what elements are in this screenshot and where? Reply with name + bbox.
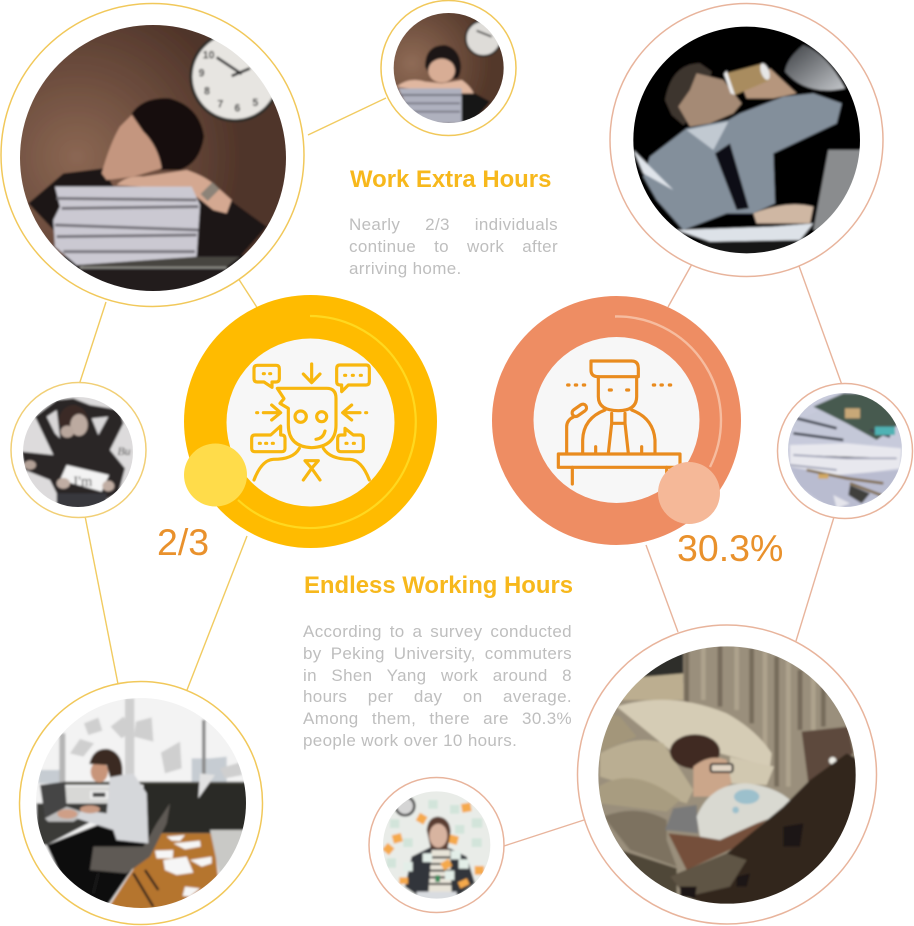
icon: speaker at a podium [558, 361, 680, 484]
photo circle: woman sleeping on paper stack: 6 [234, 103, 240, 115]
text block: work extra hours description: continue to work after [349, 237, 558, 256]
photo circle: woman with laptop in bed [578, 625, 876, 924]
text block: survey description: in Shen Yang work around 8 [303, 666, 572, 685]
text block: work extra hours description [349, 215, 558, 278]
donut: yellow 2/3 ring [184, 295, 437, 548]
photo circle: woman sleeping on paper stack [0, 4, 304, 306]
text block: survey description: According to a survey conducted [303, 622, 572, 641]
connector lines: yellow network [79, 98, 386, 690]
photo circle: multi-armed busy person holding sign: Bu [117, 444, 131, 458]
photo circle: woman sleeping on paper stack: 8 [204, 85, 210, 97]
photo circle: woman sleeping on paper stack: 10 [203, 50, 215, 62]
photo circle: piles of paper [778, 384, 912, 518]
text block: survey description: hours per day on average. [303, 687, 572, 706]
photo circle: multi-armed busy person holding sign [11, 382, 146, 518]
accent dot on orange ring [658, 462, 720, 524]
statistic: 2/3: 2/3 [157, 521, 209, 563]
photo circle: multi-armed busy person holding sign: I'm [73, 474, 93, 490]
connector lines: orange network [504, 264, 842, 846]
text block: survey description: people work over 10 hours. [303, 731, 517, 750]
text block: survey description: Among them, there are 30.3% [303, 709, 572, 728]
photo circle: man drinking coffee at night [610, 4, 883, 276]
text block: survey description [303, 622, 572, 750]
photo circle: woman sleeping on paper stack: 5 [252, 97, 258, 109]
photo circle: man at desk with flying papers [20, 682, 262, 924]
heading: Endless Working Hours: Endless Working Hours [304, 572, 573, 599]
photo circle: woman sleeping on paper stack: 9 [199, 68, 205, 80]
text block: work extra hours description: Nearly 2/3 individuals [349, 215, 558, 234]
photo circle: woman sleeping on paper stack: 7 [217, 98, 223, 110]
heading: Work Extra Hours: Work Extra Hours [350, 166, 551, 193]
text block: work extra hours description: arriving home. [349, 259, 462, 278]
icon: person surrounded by speech bubbles and arrows [252, 364, 369, 480]
photo circle: woman peering over papers [381, 0, 516, 136]
text block: survey description: by Peking University, commuters [303, 644, 572, 663]
donut: orange 30.3% ring [492, 296, 741, 545]
photo circle: woman covered with sticky notes [369, 778, 504, 912]
statistic: 30.3%: 30.3% [677, 527, 783, 569]
